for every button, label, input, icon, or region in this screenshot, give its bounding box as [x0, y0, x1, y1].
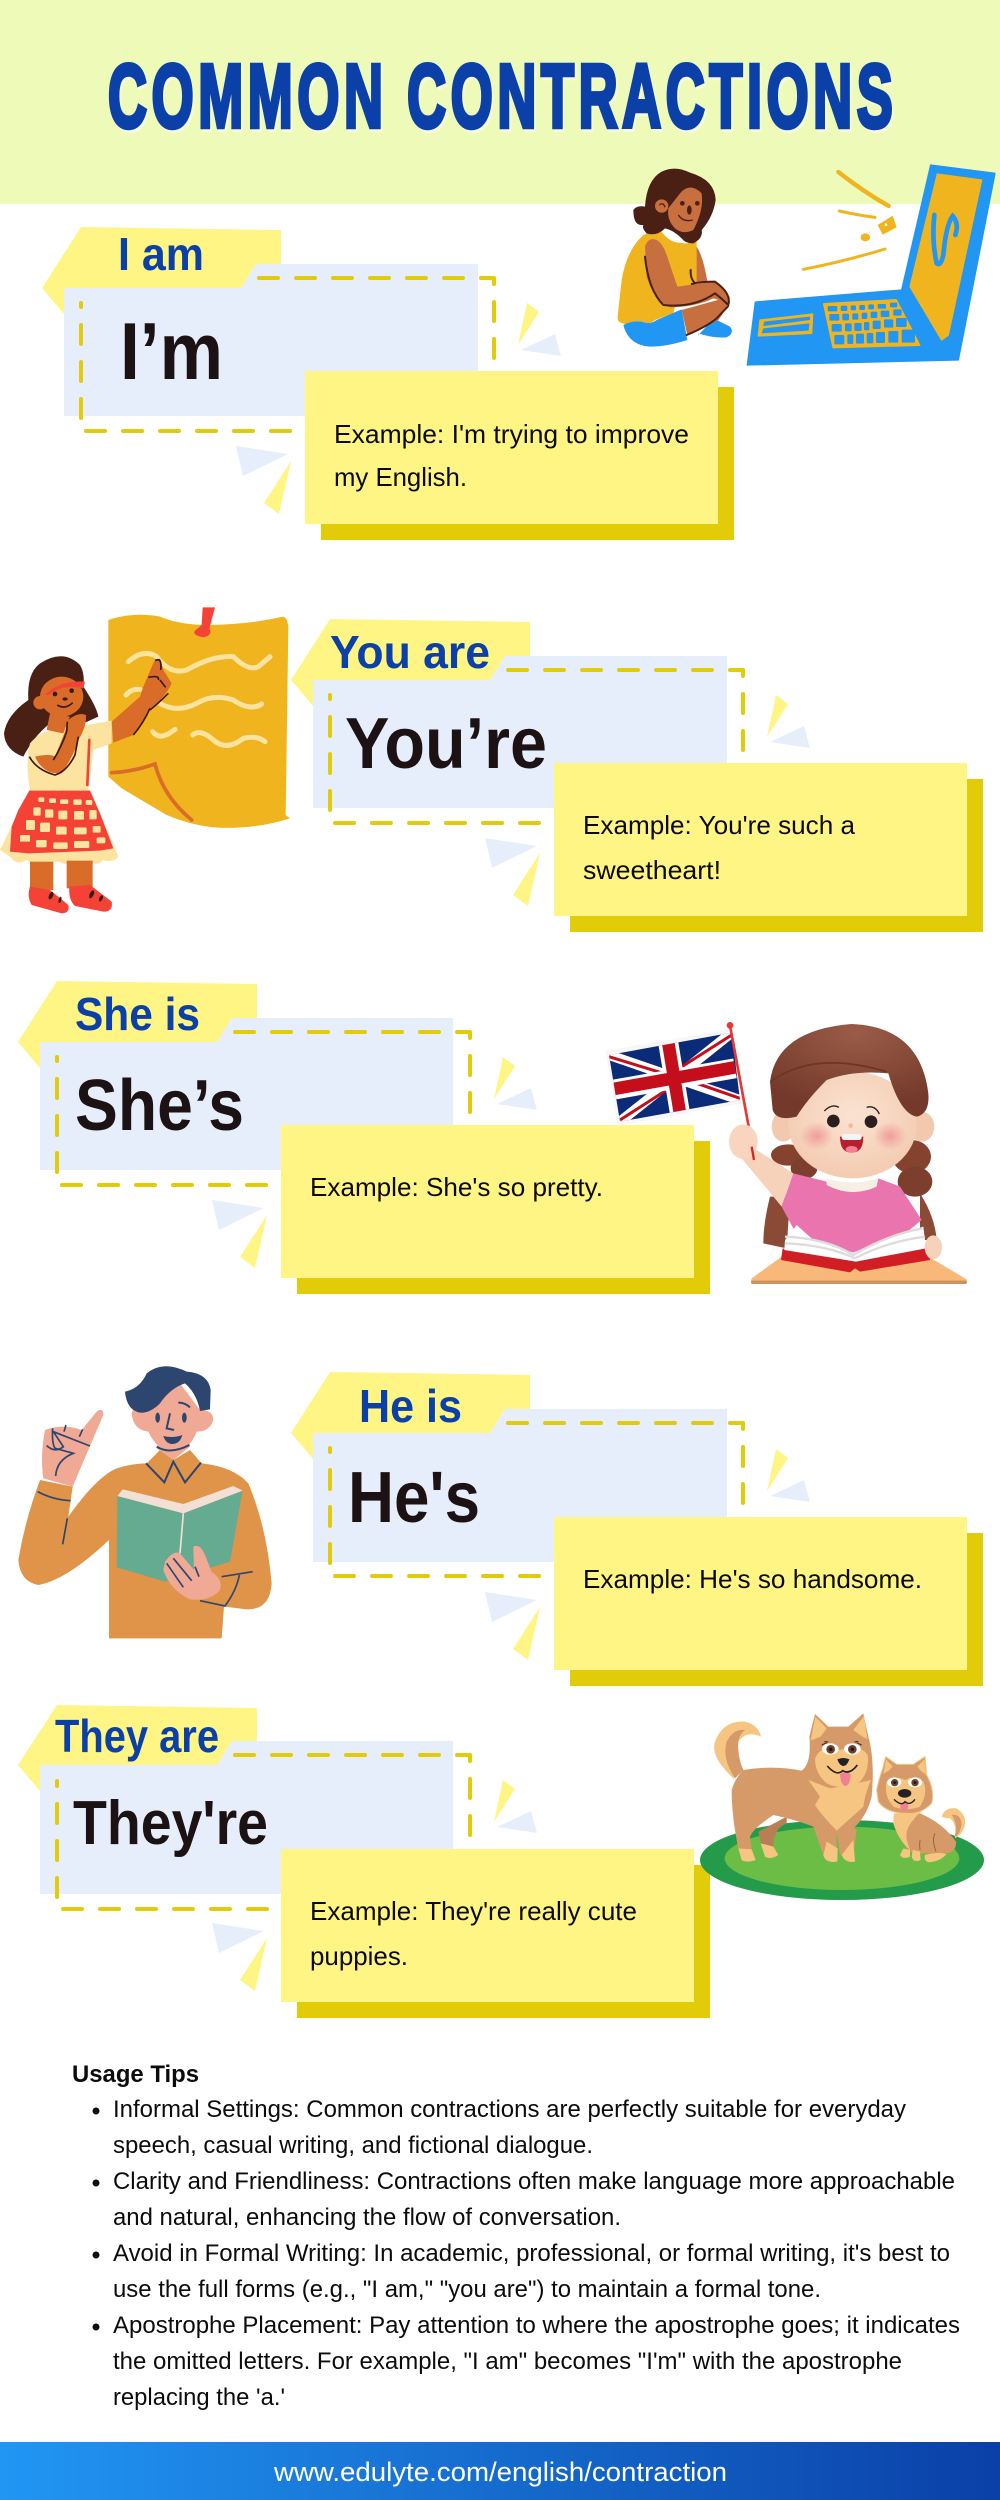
- footer bar: [0, 2442, 1000, 2500]
- bullet 1: [92, 2096, 906, 2159]
- example shadow: [570, 1533, 983, 1686]
- example box: [305, 371, 718, 524]
- label: I am: I am: [118, 228, 204, 280]
- panel: You are: [291, 619, 983, 932]
- example text line 2: my English.: [334, 462, 467, 492]
- card background: [40, 1018, 453, 1170]
- example box: [281, 1125, 694, 1278]
- example shadow: [570, 779, 983, 932]
- dashed frame: [57, 1032, 470, 1185]
- bullet 1: Informal Settings: Common contractions are perfectly suitable for everyday: [113, 2096, 906, 2123]
- bullet 3: [92, 2240, 950, 2303]
- panel: She is: [18, 981, 710, 1294]
- illustration: girl with book: [729, 1024, 967, 1284]
- illustration: girl sitting: [618, 169, 732, 347]
- example box: [554, 1517, 967, 1670]
- panel: He is: [291, 1372, 983, 1686]
- bullet 4: Apostrophe Placement: Pay attention to where the apostrophe goes; it indicates: [113, 2312, 960, 2339]
- bullet 2: [92, 2168, 955, 2231]
- bullet 3: Avoid in Formal Writing: In academic, professional, or formal writing, it's best to: [113, 2240, 950, 2267]
- example text: Example: He's so handsome.: [583, 1564, 922, 1594]
- example shadow: [321, 387, 734, 540]
- contraction: She's: She’s: [75, 1066, 244, 1146]
- example text: Example: You're such a: [583, 810, 856, 840]
- illustration: man reading book: [18, 1366, 272, 1638]
- example text line 2: sweetheart!: [583, 855, 721, 885]
- example shadow: [297, 1865, 710, 2018]
- title: COMMON CONTRACTIONS: [108, 46, 893, 146]
- tab: You are: [291, 619, 530, 706]
- label: They are: They are: [55, 1710, 219, 1762]
- label: She is: She is: [75, 988, 200, 1040]
- illustration: laptop: [747, 165, 995, 365]
- illustration: UK flag: [606, 1022, 749, 1128]
- tab: They are: [18, 1705, 257, 1791]
- example text: Example: I'm trying to improve: [334, 419, 689, 449]
- header banner: [0, 0, 1000, 204]
- contraction: I'm: I’m: [120, 307, 223, 397]
- dashed frame: [81, 278, 494, 431]
- card background: [64, 264, 478, 416]
- footer url: www.edulyte.com/english/contraction: [273, 2457, 727, 2487]
- label: You are: You are: [330, 626, 490, 678]
- panel: They are: [18, 1705, 710, 2018]
- contraction: They're: They're: [73, 1789, 268, 1858]
- bullet 2: and natural, enhancing the flow of conversation.: [113, 2204, 621, 2231]
- tab: I am: [42, 227, 281, 314]
- example box: [281, 1849, 694, 2002]
- example text line 2: puppies.: [310, 1941, 408, 1971]
- sparks: [485, 1449, 810, 1660]
- bullet 4: the omitted letters. For example, "I am" becomes "I'm" with the apostrophe: [113, 2348, 902, 2375]
- bullet 4: [92, 2312, 960, 2411]
- dashed frame: [330, 670, 743, 823]
- sparks: [212, 1780, 537, 1991]
- dashed frame: [57, 1755, 470, 1909]
- tips heading: Usage Tips: [72, 2061, 199, 2088]
- contraction: He's: He's: [348, 1458, 480, 1538]
- illustration: two dogs on grass: [700, 1713, 984, 1900]
- usage tips: [72, 2061, 960, 2411]
- tab: He is: [291, 1372, 530, 1459]
- example box: [554, 763, 967, 916]
- example text: Example: They're really cute: [310, 1896, 637, 1926]
- contraction: You're: You’re: [345, 704, 547, 784]
- card background: [313, 1409, 727, 1562]
- illustration: girl pointing at paper: [0, 607, 290, 913]
- tab: She is: [18, 981, 257, 1068]
- panel: I am: [42, 227, 734, 540]
- bullet 1: speech, casual writing, and fictional dialogue.: [113, 2132, 593, 2159]
- sparks: [212, 1057, 537, 1268]
- bullet 4: replacing the 'a.': [113, 2384, 285, 2411]
- sparks: [236, 303, 561, 514]
- dashed frame: [330, 1423, 743, 1576]
- label: He is: He is: [359, 1380, 462, 1432]
- example shadow: [297, 1141, 710, 1294]
- card background: [313, 656, 727, 808]
- bullet 3: use the full forms (e.g., "I am," "you are") to maintain a formal tone.: [113, 2276, 821, 2303]
- bullet 2: Clarity and Friendliness: Contractions often make language more approachable: [113, 2168, 955, 2195]
- card background: [40, 1741, 453, 1894]
- example text: Example: She's so pretty.: [310, 1172, 603, 1202]
- sparks: [485, 695, 810, 906]
